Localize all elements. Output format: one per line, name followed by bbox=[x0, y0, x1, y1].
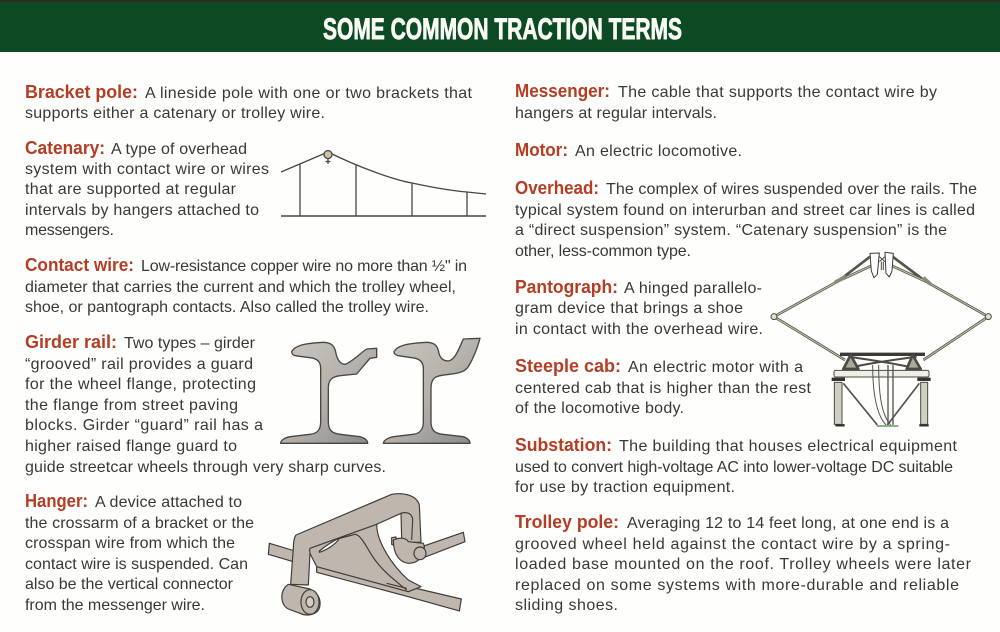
term: Catenary: system with contact wire or wires bbox=[25, 161, 269, 178]
term: Catenary: Catenary: bbox=[25, 137, 105, 158]
term: Overhead: The complex of wires suspended over the rails. The bbox=[606, 181, 977, 198]
term: Trolley pole: Trolley pole: bbox=[515, 511, 619, 532]
pivot bbox=[282, 584, 320, 615]
term: Substation bbox=[515, 434, 958, 496]
term: Overhead: Overhead: bbox=[515, 177, 599, 198]
term: Bracket pole: supports either a catenary or trolley wire. bbox=[25, 105, 325, 122]
term: Substation: used to convert high-voltage AC into lower-voltage DC suitable bbox=[515, 459, 953, 476]
term: Substation: Substation: bbox=[515, 434, 612, 455]
term: Hanger: A device attached to bbox=[95, 494, 242, 511]
title: SOME COMMON TRACTION TERMS bbox=[323, 13, 682, 46]
term: Girder rail: blocks. Girder “guard” rail has a bbox=[25, 417, 263, 434]
term: Substation: for use by traction equipment. bbox=[515, 479, 735, 496]
grooved rail bbox=[281, 342, 377, 443]
term: Trolley pole: loaded base mounted on the roof. Trolley wheels were later bbox=[515, 556, 972, 573]
contact wire bbox=[317, 565, 461, 611]
term: Contact wire: Contact wire: bbox=[25, 254, 134, 275]
term: Catenary bbox=[25, 137, 269, 239]
term: Hanger bbox=[25, 490, 254, 614]
insulators bbox=[832, 374, 931, 384]
term: Bracket pole: A lineside pole with one or two brackets that bbox=[145, 85, 473, 102]
term: Motor: Motor: bbox=[515, 139, 568, 160]
term: Catenary: intervals by hangers attached to bbox=[25, 202, 259, 219]
term: Contact wire: shoe, or pantograph contacts. Also called the trolley wire. bbox=[25, 299, 429, 316]
term: Girder rail: “grooved” rail provides a guard bbox=[25, 356, 253, 373]
pantograph arms bbox=[774, 257, 988, 360]
term: Messenger: The cable that supports the contact wire by bbox=[618, 84, 937, 101]
term: Trolley pole: grooved wheel held against the contact wire by a spring- bbox=[515, 536, 950, 553]
messenger wire bbox=[268, 543, 295, 562]
term: Pantograph bbox=[515, 276, 763, 338]
term: Trolley pole: replaced on some systems with more-durable and reliable bbox=[515, 577, 959, 594]
guard rail bbox=[383, 338, 480, 443]
term: Girder rail: guide streetcar wheels through very sharp curves. bbox=[25, 459, 386, 476]
term: Hanger: crosspan wire from which the bbox=[25, 535, 235, 552]
term: Bracket pole: Bracket pole: bbox=[25, 81, 138, 102]
term: Messenger bbox=[515, 80, 937, 122]
term: Hanger: the crossarm of a bracket or the bbox=[25, 515, 254, 532]
term: Steeple cab: centered cab that is higher than the rest bbox=[515, 380, 812, 397]
term: Pantograph: A hinged parallelo- bbox=[624, 280, 762, 297]
term: Girder rail: the flange from street paving bbox=[25, 397, 238, 414]
term: Girder rail: Two types – girder bbox=[124, 335, 256, 352]
term: Girder rail bbox=[25, 331, 386, 476]
term: Overhead: a “direct suspension” system. “Catenary suspension” is the bbox=[515, 222, 947, 239]
term: Catenary: that are supported at regular bbox=[25, 181, 237, 198]
term: Trolley pole: Averaging 12 to 14 feet long, at one end is a bbox=[627, 515, 949, 532]
illustration: girder rail cross-sections bbox=[281, 338, 480, 443]
term: Contact wire: diameter that carries the current and which the trolley wheel, bbox=[25, 279, 456, 296]
braces and leads bbox=[843, 383, 919, 425]
term: Hanger: contact wire is suspended. Can bbox=[25, 556, 248, 573]
term: Overhead: other, less-common type. bbox=[515, 243, 691, 260]
term: Substation: The building that houses electrical equipment bbox=[619, 438, 958, 455]
term: Messenger: Messenger: bbox=[515, 80, 610, 101]
title banner bbox=[0, 0, 1000, 52]
base frame bbox=[840, 349, 925, 359]
term: Steeple cab bbox=[515, 355, 812, 417]
illustration: pantograph bbox=[771, 252, 991, 426]
term: Overhead: typical system found on interurban and street car lines is called bbox=[515, 202, 975, 219]
shoes bbox=[870, 253, 879, 278]
term: Contact wire bbox=[25, 254, 467, 316]
term: Hanger: from the messenger wire. bbox=[25, 597, 205, 614]
term: Trolley pole: sliding shoes. bbox=[515, 597, 618, 614]
term: Girder rail: higher raised flange guard to bbox=[25, 438, 237, 455]
term: Pantograph: gram device that brings a shoe bbox=[515, 300, 743, 317]
bolt bbox=[393, 538, 424, 563]
term: Steeple cab: of the locomotive body. bbox=[515, 400, 684, 417]
term: Catenary: A type of overhead bbox=[111, 141, 247, 158]
term: Girder rail: for the wheel flange, protecting bbox=[25, 376, 256, 393]
term: Motor: An electric locomotive. bbox=[575, 143, 742, 160]
term: Girder rail: Girder rail: bbox=[25, 331, 117, 352]
term: Catenary: messengers. bbox=[25, 222, 114, 239]
term: Overhead bbox=[515, 177, 977, 260]
term: Steeple cab: An electric motor with a bbox=[628, 359, 803, 376]
term: Steeple cab: Steeple cab: bbox=[515, 355, 621, 376]
illustration: catenary system bbox=[281, 150, 486, 216]
term: Bracket pole bbox=[25, 81, 473, 122]
term: Hanger: also be the vertical connector bbox=[25, 576, 234, 593]
term: Contact wire: Low-resistance copper wire no more than ½" in bbox=[141, 258, 467, 275]
term: Hanger: Hanger: bbox=[25, 490, 88, 511]
term: Motor bbox=[515, 139, 742, 160]
term: Trolley pole bbox=[515, 511, 972, 614]
term: Messenger: hangers at regular intervals. bbox=[515, 105, 717, 122]
illustration: hanger bbox=[268, 494, 465, 615]
side wire and clamp bbox=[420, 532, 465, 559]
term: Pantograph: in contact with the overhead wire. bbox=[515, 321, 763, 338]
hanger body and crossarm bbox=[291, 494, 421, 592]
term: Pantograph: Pantograph: bbox=[515, 276, 618, 297]
